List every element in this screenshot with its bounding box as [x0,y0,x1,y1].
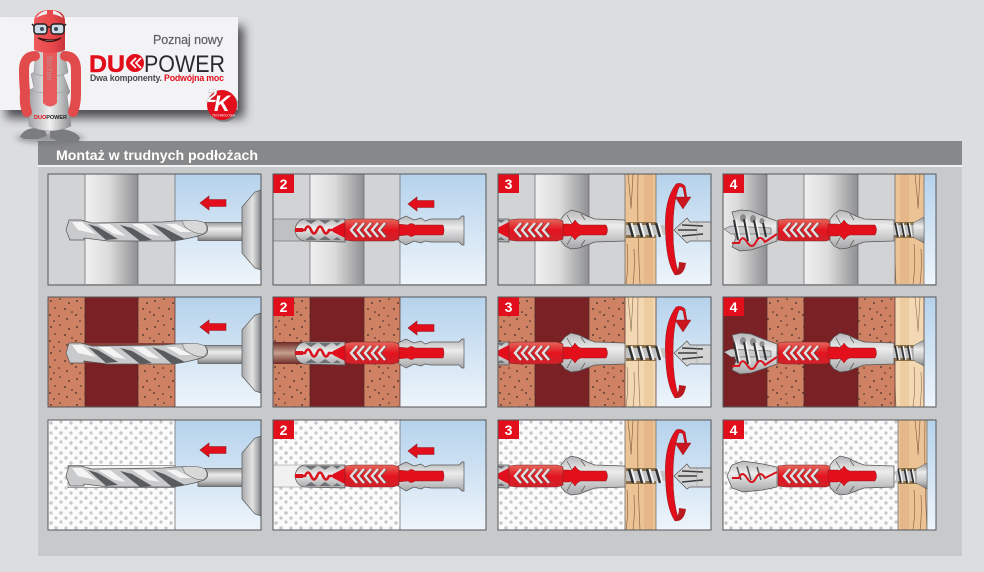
mascot brand text: DUOPOWER [34,115,67,121]
step 4 concrete: fixed [713,174,936,284]
badge: 2K technologia: K [214,91,232,116]
card shadow [6,26,244,118]
mascot feet [20,128,80,142]
mascot smile [38,38,61,42]
step 2 aerated: insert dowel [273,420,486,530]
step 1 concrete: drilling [48,174,261,284]
row 3: aerated concrete [48,420,936,530]
number badge 4 [723,174,744,193]
number badge 2: 2 [280,422,288,438]
step 4 aerated: fixed [723,420,936,530]
badge: 2K technologia: 2 [206,86,217,106]
number badge 3 [498,174,519,193]
badge: 2K technologia [206,86,239,122]
number badge 3: 3 [505,299,513,315]
number badge 4: 4 [730,176,738,192]
number badge 2 [273,420,294,439]
number badge 2: 2 [280,299,288,315]
logo: DUO POWER: DU [89,51,125,78]
mascot strip lettering: fischer [45,56,55,81]
number badge 4 [723,420,744,439]
mascot glasses [32,24,66,34]
step 1 brick: drilling [48,297,261,407]
row 1: concrete [48,174,936,284]
badge: 2K technologia: TECHNOLOGIA [212,114,236,118]
step 2 concrete: insert dowel [273,174,486,284]
text: Poznaj nowy: Poznaj nowy [153,33,224,47]
number badge 3: 3 [505,422,513,438]
number badge 2 [273,297,294,316]
logo: DUO POWER [89,51,225,78]
row 2: hollow brick [48,297,936,407]
mascot arms [24,56,76,112]
promo card [0,17,239,122]
step 3 concrete: screw [498,174,710,284]
step 1 aerated: drilling [48,420,261,530]
panel outlines [48,174,936,530]
mascot [16,10,84,143]
number badge 4: 4 [730,422,738,438]
number badge 2 [273,174,294,193]
logo: DUO POWER: POWER [144,51,225,78]
number badge 3: 3 [505,176,513,192]
heading bar: Montaż w trudnych podłożach [38,141,962,167]
mascot head [34,10,65,53]
mascot body [29,51,71,131]
mascot centre strip [43,50,57,106]
number badge 3 [498,297,519,316]
step 2 brick: insert dowel [273,297,486,407]
number badge 4 [723,297,744,316]
number badge 2: 2 [280,176,288,192]
step 4 brick: fixed [723,297,936,407]
step 3 brick: screw [498,298,710,406]
heading bar: Montaż w trudnych podłożach: Montaż w trudnych podłożach [56,147,258,163]
panel: main content area [38,141,962,556]
tagline: Dwa komponenty. Podwójna moc [90,73,224,83]
number badge 4: 4 [730,299,738,315]
step 3 aerated: screw [498,420,710,530]
number badge 3 [498,420,519,439]
